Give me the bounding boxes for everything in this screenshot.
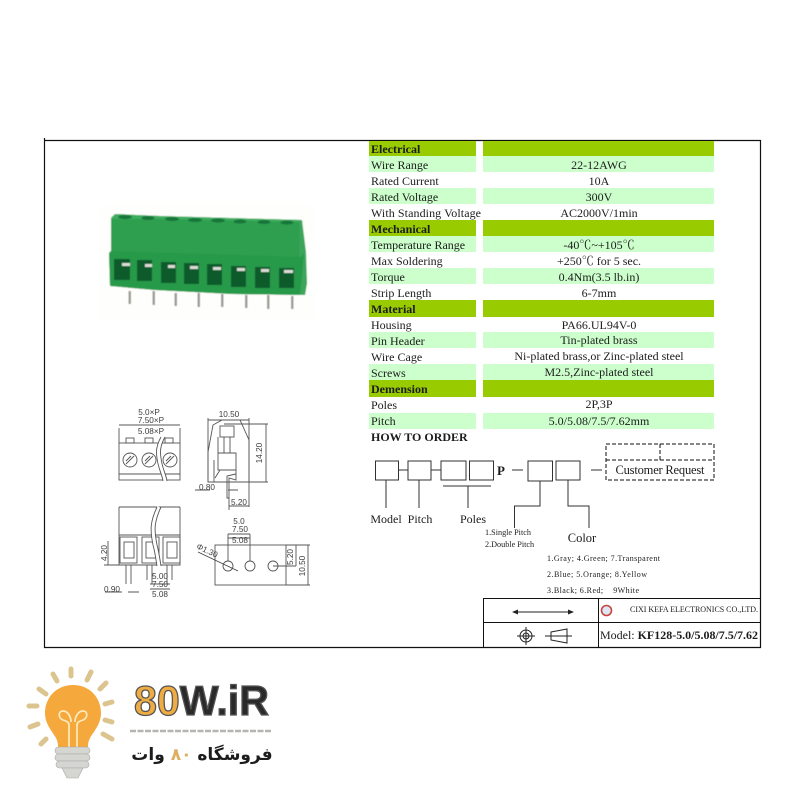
technical drawing: wire entry view: 0.90 xyxy=(104,585,120,594)
ordering code diagram: Color xyxy=(568,531,597,545)
technical drawing: side view: 14.20 xyxy=(255,442,264,463)
right column values: 0.4Nm(3.5 lb.in) xyxy=(559,270,639,284)
left column labels xyxy=(371,142,481,428)
technical drawing: wire entry view: 7.50 xyxy=(152,580,168,589)
right column values: AC2000V/1min xyxy=(560,206,638,220)
technical drawing: side view: 5.20 xyxy=(231,498,247,507)
right column values: 5.0/5.08/7.5/7.62mm xyxy=(549,414,650,428)
ordering code diagram: 1.Gray; 4.Green; 7.Transparent xyxy=(547,554,661,563)
right column values: 10A xyxy=(589,174,610,188)
left column labels: Housing xyxy=(371,318,412,332)
specification table xyxy=(369,141,714,429)
watermark logo: 80W.iR xyxy=(29,669,273,778)
wire openings xyxy=(114,259,294,288)
technical drawing: footprint view: 10.50 xyxy=(298,555,307,576)
icon: light bulb xyxy=(29,669,112,778)
brand name: 80W.iR xyxy=(134,677,269,724)
technical drawing: wire entry view xyxy=(100,507,180,599)
title block: Model: KF128-5.0/5.08/7.5/7.62 xyxy=(600,628,758,642)
right column values: PA66.UL94V-0 xyxy=(562,318,636,332)
heading: how to order: HOW TO ORDER xyxy=(371,430,468,444)
ordering code diagram: Customer Request xyxy=(616,463,705,477)
left column labels: Screws xyxy=(371,366,406,380)
pins xyxy=(128,291,294,309)
title block: CIXI KEFA ELECTRONICS CO.,LTD. xyxy=(630,605,758,614)
top holes xyxy=(118,215,294,224)
technical drawing: side view: 0.80 xyxy=(199,483,215,492)
ordering code diagram: 2.Blue; 5.Orange; 8.Yellow xyxy=(547,570,647,579)
row bands xyxy=(369,141,714,429)
right column values xyxy=(514,158,684,428)
ordering code diagram xyxy=(370,444,714,595)
technical drawing: footprint view: Φ1.30 xyxy=(195,542,220,560)
right column values: M2.5,Zinc-plated steel xyxy=(545,365,654,379)
technical drawing: front view: 5.0×P xyxy=(138,408,160,417)
left column labels: Wire Range xyxy=(371,158,428,172)
ordering code diagram: Pitch xyxy=(408,512,432,526)
technical drawing: side view: 10.50 xyxy=(219,410,240,419)
left column labels: Demension xyxy=(371,382,428,396)
left column labels: Temperature Range xyxy=(371,238,465,252)
technical drawing: wire entry view: 5.08 xyxy=(152,590,168,599)
right column values: -40℃~+105℃ xyxy=(563,238,635,252)
left column labels: Pitch xyxy=(371,414,396,428)
ordering code diagram: Poles xyxy=(460,512,486,526)
technical drawing: footprint view: 5.08 xyxy=(232,536,248,545)
right column values: 22-12AWG xyxy=(571,158,627,172)
left column labels: Wire Cage xyxy=(371,350,422,364)
ordering code diagram: 2.Double Pitch xyxy=(485,540,534,549)
icon: projection symbol xyxy=(517,627,572,645)
technical drawing: side view xyxy=(195,410,268,510)
left column labels: Mechanical xyxy=(371,222,431,236)
left column labels: Strip Length xyxy=(371,286,431,300)
technical drawing: footprint view: 7.50 xyxy=(232,525,248,534)
right column values: Tin-plated brass xyxy=(560,333,638,347)
icon: dimension arrow xyxy=(512,610,574,614)
left column labels: Rated Voltage xyxy=(371,190,438,204)
product photo: green terminal block xyxy=(100,205,315,320)
right column values: 300V xyxy=(586,190,613,204)
technical drawing: footprint view: 5.0 xyxy=(233,517,245,526)
panel frame xyxy=(44,138,760,648)
ordering code diagram: 3.Black; 6.Red; 9White xyxy=(547,586,639,595)
ordering code diagram: 1.Single Pitch xyxy=(485,528,531,537)
technical drawing: footprint view: 5.20 xyxy=(286,549,295,565)
persian tagline: فروشگاه ۸۰ وات xyxy=(131,744,273,765)
technical drawing: front view: 7.50×P xyxy=(138,416,165,425)
right column values: 2P,3P xyxy=(585,397,613,411)
left column labels: Rated Current xyxy=(371,174,439,188)
technical drawing: footprint view xyxy=(195,517,310,585)
ordering code diagram: P xyxy=(497,463,505,478)
technical drawing: wire entry view: 4.20 xyxy=(100,545,109,561)
dashed divider xyxy=(130,730,272,732)
right column values: Ni-plated brass,or Zinc-plated steel xyxy=(514,349,684,363)
left column labels: Pin Header xyxy=(371,334,425,348)
technical drawing: front view xyxy=(119,408,180,481)
ordering code diagram: Model xyxy=(370,512,402,526)
right column values: +250℃ for 5 sec. xyxy=(557,254,641,268)
left column labels: With Standing Voltage xyxy=(371,206,481,220)
left column labels: Electrical xyxy=(371,142,421,156)
icon: company logo xyxy=(602,606,612,616)
left column labels: Max Soldering xyxy=(371,254,443,268)
title block xyxy=(484,598,760,647)
left column labels: Torque xyxy=(371,270,405,284)
left column labels: Poles xyxy=(371,398,397,412)
technical drawing: front view: 5.08×P xyxy=(138,427,165,436)
technical drawing: wire entry view: 5.00 xyxy=(152,572,168,581)
right column values: 6-7mm xyxy=(582,286,617,300)
left column labels: Material xyxy=(371,302,416,316)
